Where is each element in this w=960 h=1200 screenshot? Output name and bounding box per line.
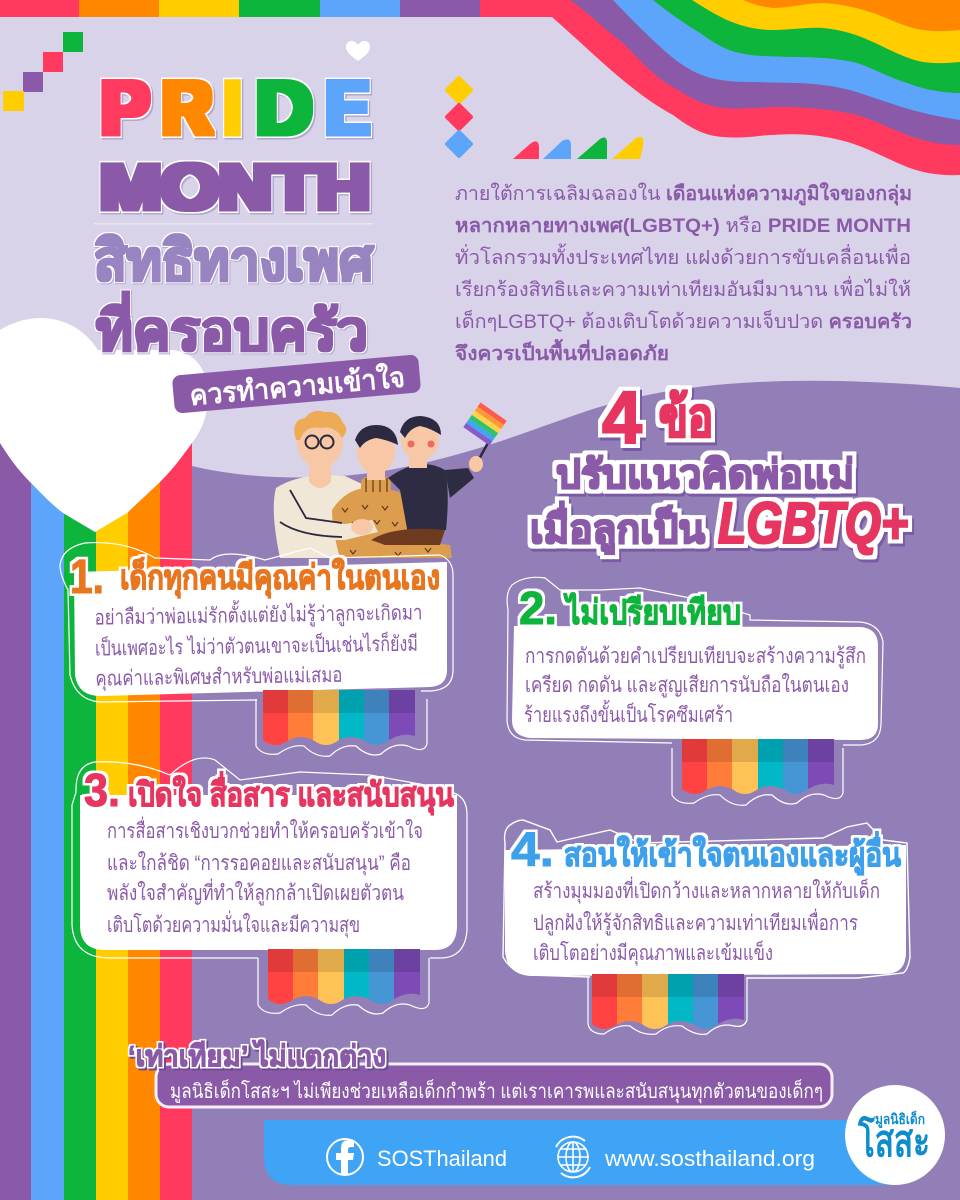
panel 2 card: [512, 626, 878, 740]
panel 2 heading: ไม่เปรียบเทียบ: [563, 592, 741, 632]
main heading: 4 points: 4: [602, 376, 642, 459]
panel 1 heading: 1.: [70, 551, 104, 604]
logo: โสสะ: [857, 1114, 930, 1166]
website label: www.sosthailand.org: [604, 1146, 815, 1171]
panel 2: [507, 577, 883, 745]
main heading: 4 points: ปรับแนวคิดพ่อแม่: [556, 453, 854, 497]
title: PRIDE: R: [162, 66, 212, 151]
bottom banner text: มูลนิธิเด็กโสสะฯ ไม่เพียงช่วยเหลือเด็กกำพร้า แต่เราเคารพและสนับสนุนทุกตัวตนของเด็กๆ: [170, 1078, 823, 1104]
panel 1 outline: [60, 543, 453, 702]
panel 1 body: อย่าลืมว่าพ่อแม่รักตั้งแต่ยังไม่รู้ว่าลูกจะเกิดมา: [94, 597, 423, 631]
bottom heading: ‘เท่าเทียม’ ไม่แตกต่าง: [128, 1039, 386, 1073]
panel 1 ribbon: [256, 690, 427, 756]
panel 4 card: [505, 845, 906, 976]
main heading: 4 points: LGBTQ+: [718, 491, 908, 556]
panel 1 card: [74, 562, 447, 696]
panel 3 body: [107, 816, 423, 938]
fin shapes decoration: [513, 137, 643, 159]
panel 4 body: เติบโตอย่างมีคุณภาพและเข้มแข็ง: [533, 939, 773, 966]
panel 1 heading: เด็กทุกคนมีคุณค่าในตนเอง: [120, 556, 440, 599]
panel 3 heading: [84, 764, 454, 816]
panel 3 heading: 3.: [84, 764, 120, 816]
logo: [845, 1085, 945, 1185]
panel 4 heading: สอนให้เข้าใจตนเองและผู้อื่น: [564, 831, 901, 876]
pixel squares decoration: [3, 32, 83, 111]
panel 2 body: การกดดันด้วยคำเปรียบเทียบจะสร้างความรู้สึก: [525, 645, 866, 669]
title: PRIDE: D: [256, 66, 312, 151]
flag: [463, 403, 507, 470]
panel 4 heading: [511, 824, 901, 877]
diamonds decoration: [444, 75, 474, 159]
adult left: [274, 475, 362, 558]
panel 2 heading: [519, 582, 741, 634]
panel 2 outline: [507, 577, 883, 745]
logo: มูลนิธิเด็ก: [875, 1110, 925, 1128]
panel 2 heading: 2.: [519, 582, 557, 634]
middle adult head: [367, 462, 385, 480]
rainbow flag wave top right: [540, 0, 960, 175]
large white heart: [0, 318, 208, 532]
child body: [388, 464, 448, 534]
title: Thai line 2: ที่ครอบครัว: [96, 291, 368, 362]
panel 1 body: คุณค่าและพิเศษสำหรับพ่อแม่เสมอ: [95, 664, 343, 692]
panel 4 body: สร้างมุมมองที่เปิดกว้างและหลากหลายให้กับเด็ก: [533, 876, 880, 904]
intro paragraph: จึงควรเป็นพื้นที่ปลอดภัย: [454, 338, 669, 365]
title: PRIDE: [101, 66, 369, 151]
bottom banner: [156, 1064, 832, 1107]
title: PRIDE: P: [101, 66, 149, 151]
title: Thai line 1: สิทธิทางเพศ: [94, 229, 374, 292]
panel 3 card: [80, 795, 457, 950]
panel 3: [72, 758, 467, 958]
title divider: [94, 223, 373, 224]
panel 4 outline: [503, 820, 910, 978]
panel 2 body: ร้ายแรงถึงขั้นเป็นโรคซึมเศร้า: [524, 700, 733, 727]
panel 3 heading: เปิดใจ สื่อสาร และสนับสนุน: [128, 771, 454, 816]
illustration: family: [274, 403, 507, 558]
main heading: 4 points: ข้อ: [659, 388, 713, 448]
main heading: 4 points: เมื่อลูกเป็น: [530, 501, 705, 554]
icon: small white heart: [346, 41, 370, 61]
panel 3 ribbon: [258, 949, 429, 1015]
panel 1 body: เป็นเพศอะไร ไม่ว่าตัวตนเขาจะเป็นเช่นไรก็ยังมี: [95, 630, 418, 661]
intro paragraph: เด็กๆLGBTQ+ ต้องเติบโตด้วยความเจ็บปวด ครอบครัว: [455, 309, 912, 333]
footer contact bar: [264, 1120, 890, 1185]
panel 2 body: [524, 645, 866, 727]
adult arm: [280, 518, 378, 540]
panel 2 ribbon: [672, 739, 843, 805]
panel 4 body: ปลูกฝังให้รู้จักสิทธิและความเท่าเทียมเพื่อการ: [533, 908, 858, 936]
panel 4 body: [533, 876, 880, 966]
title: PRIDE: E: [326, 66, 369, 151]
subtitle pill: ควรทำความเข้าใจ: [188, 361, 406, 411]
hand: [351, 519, 373, 535]
icon: facebook: [327, 1139, 363, 1175]
top rainbow bar: [0, 0, 560, 17]
panel 3 body: และใกล้ชิด “การรอคอยและสนับสนุน” คือ: [107, 851, 411, 876]
title: MONTH: MONTH: [100, 151, 370, 223]
panel 1: [60, 543, 453, 702]
panel 4 heading: 4.: [511, 824, 554, 877]
panel 2 body: เครียด กดดัน และสูญเสียการนับถือในตนเอง: [525, 673, 849, 698]
panel 4: [503, 820, 910, 978]
intro paragraph: เรียกร้องสิทธิและความเท่าเทียมอันมีมานาน เพื่อไม่ให้: [455, 276, 911, 301]
intro paragraph: หลากหลายทางเพศ(LGBTQ+) หรือ PRIDE MONTH: [455, 215, 911, 237]
panel 1 heading: [70, 551, 440, 604]
intro paragraph: [454, 182, 912, 365]
main heading: 4 points: [530, 376, 908, 556]
intro paragraph: ภายใต้การเฉลิมฉลองใน เดือนแห่งความภูมิใจของกลุ่ม: [455, 182, 912, 207]
panel 1 body: [94, 597, 424, 692]
vertical rainbow stripes: [0, 400, 192, 1200]
panel 3 body: พลังใจสำคัญที่ทำให้ลูกกล้าเปิดเผยตัวตน: [107, 878, 404, 906]
lower purple wave background: [0, 381, 960, 1200]
icon: globe: [556, 1137, 590, 1177]
intro paragraph: ทั่วโลกรวมทั้งประเทศไทย แฝงด้วยการขับเคลื่อนเพื่อ: [455, 243, 911, 269]
title: PRIDE: I: [225, 66, 240, 151]
panel 3 body: เติบโตด้วยความมั่นใจและมีความสุข: [107, 910, 360, 938]
panel 3 outline: [72, 758, 467, 958]
child head: [409, 450, 427, 468]
panel 4 ribbon: [588, 974, 747, 1036]
middle adult sweater: [332, 488, 452, 558]
facebook label: SOSThailand: [377, 1146, 507, 1171]
panel 3 body: การสื่อสารเชิงบวกช่วยทำให้ครอบครัวเข้าใจ: [107, 816, 423, 843]
